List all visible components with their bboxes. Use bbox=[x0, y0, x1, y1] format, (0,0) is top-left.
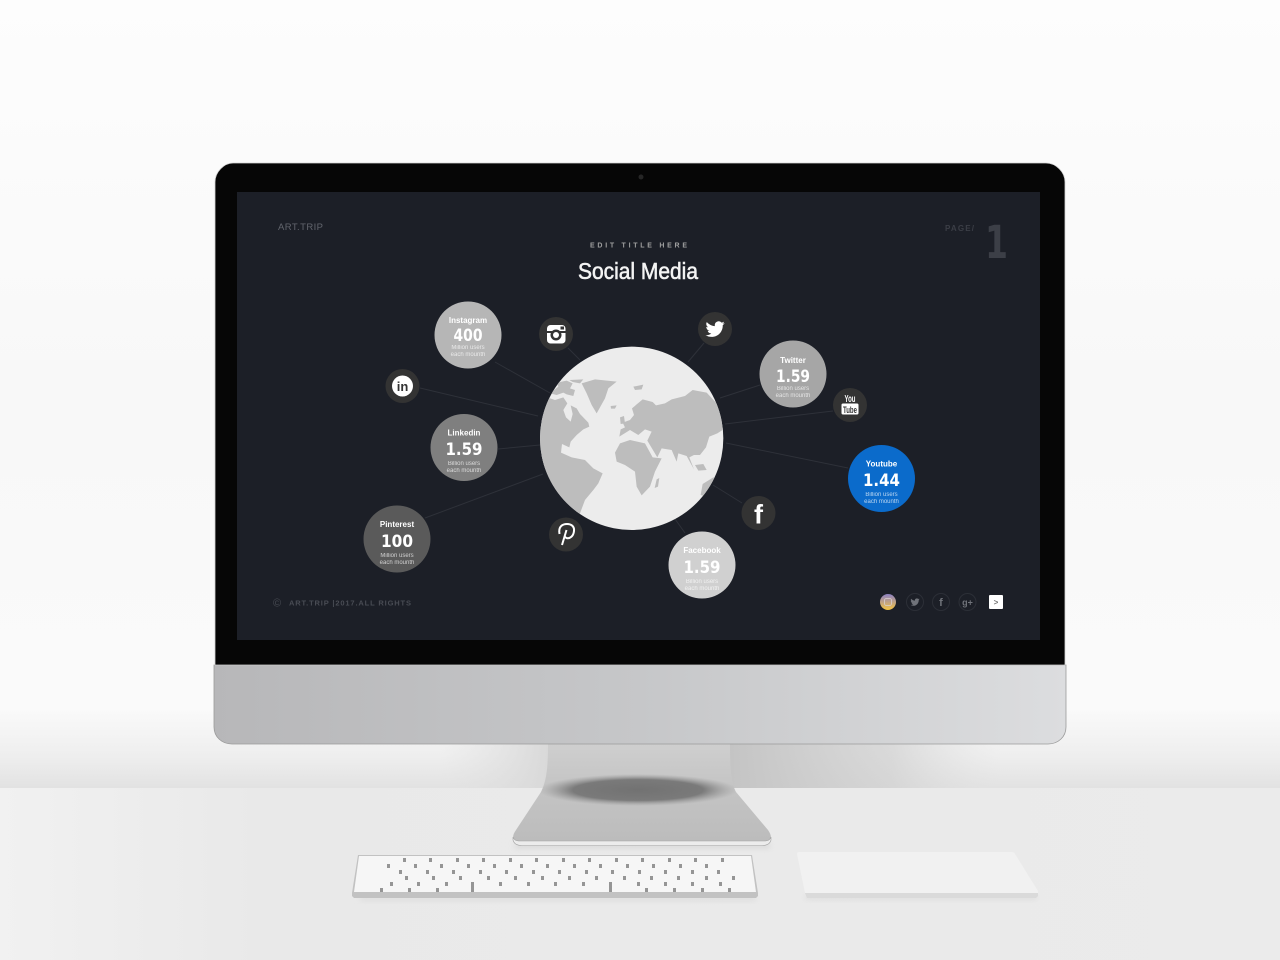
monitor body bbox=[214, 163, 1066, 744]
world globe bbox=[530, 347, 730, 530]
africa bbox=[615, 440, 662, 495]
greenland bbox=[582, 379, 617, 413]
icon: linkedin bbox=[386, 369, 420, 403]
footer social icons: g+ bbox=[962, 598, 973, 608]
brand label: ART.TRIP bbox=[278, 222, 323, 233]
keyboard bbox=[352, 855, 758, 898]
bubble: facebook: Facebook bbox=[683, 546, 721, 555]
connector lines bbox=[420, 343, 848, 533]
footer copyright: ART.TRIP |2017.ALL RIGHTS bbox=[289, 598, 411, 608]
page label: PAGE/ bbox=[945, 224, 975, 233]
bubble: pinterest: Pinterest bbox=[380, 520, 414, 529]
americas bbox=[540, 398, 602, 514]
britain bbox=[620, 416, 625, 424]
bubble: instagram: Instagram bbox=[449, 316, 487, 325]
next button: > bbox=[994, 598, 999, 607]
icon: instagram bbox=[539, 317, 573, 351]
footer social icons bbox=[880, 594, 976, 610]
footer social icons: f bbox=[939, 597, 943, 609]
bubble: youtube: Billion users bbox=[865, 492, 898, 498]
bubble: instagram: 400 bbox=[454, 326, 483, 346]
bubble: facebook: 1.59 bbox=[684, 558, 720, 578]
bubble: instagram: each mounth bbox=[451, 352, 485, 358]
bubble: twitter: each mounth bbox=[776, 393, 810, 399]
screen panel bbox=[237, 192, 1040, 640]
arctic islands bbox=[550, 379, 643, 409]
bubble: youtube: each mounth bbox=[864, 499, 899, 505]
madagascar bbox=[655, 478, 659, 488]
australia bbox=[700, 478, 714, 496]
bubble: linkedin: Linkedin bbox=[448, 428, 481, 438]
icon: facebook bbox=[742, 496, 776, 530]
title: Social Media bbox=[578, 258, 698, 284]
monitor stand bbox=[513, 744, 771, 846]
bubble: pinterest: each mounth bbox=[380, 560, 414, 566]
bubble: instagram: Million users bbox=[451, 345, 485, 351]
bubble: twitter: 1.59 bbox=[776, 367, 810, 387]
icon: facebook: f bbox=[754, 500, 764, 530]
bubble: linkedin: 1.59 bbox=[446, 440, 482, 460]
indonesia bbox=[695, 464, 707, 471]
kicker: EDIT TITLE HERE bbox=[590, 242, 687, 250]
bubble: twitter: Twitter bbox=[780, 356, 806, 365]
bubble: linkedin: each mounth bbox=[447, 468, 481, 474]
bubble: youtube bbox=[848, 445, 915, 512]
bubble: youtube: Youtube bbox=[866, 460, 898, 468]
bubble: pinterest: 100 bbox=[381, 532, 413, 552]
eurasia bbox=[619, 390, 727, 469]
bubble: pinterest: Million users bbox=[380, 553, 414, 559]
page number: 1 bbox=[985, 216, 1008, 269]
bubble: facebook: each mounth bbox=[685, 586, 719, 592]
bubble: linkedin: Billion users bbox=[448, 461, 480, 467]
next button bbox=[989, 595, 1003, 609]
bubble: facebook: Billion users bbox=[686, 579, 718, 585]
icon: youtube bbox=[833, 388, 867, 422]
icon: twitter bbox=[698, 312, 732, 346]
bubble: twitter: Billion users bbox=[777, 386, 809, 392]
icon: pinterest bbox=[549, 518, 583, 552]
bubble: pinterest bbox=[364, 506, 430, 572]
icon: youtube: You bbox=[844, 394, 856, 405]
bubble: facebook bbox=[668, 532, 736, 598]
icon: linkedin: in bbox=[397, 379, 408, 394]
bubble: youtube: 1.44 bbox=[863, 471, 900, 491]
icon: youtube: Tube bbox=[843, 405, 857, 416]
bubble: twitter bbox=[760, 340, 826, 408]
footer copyright bbox=[273, 598, 411, 610]
bubble: instagram bbox=[434, 302, 502, 368]
footer copyright: © bbox=[273, 598, 281, 610]
trackpad bbox=[797, 852, 1038, 898]
bubble: linkedin bbox=[430, 414, 498, 481]
